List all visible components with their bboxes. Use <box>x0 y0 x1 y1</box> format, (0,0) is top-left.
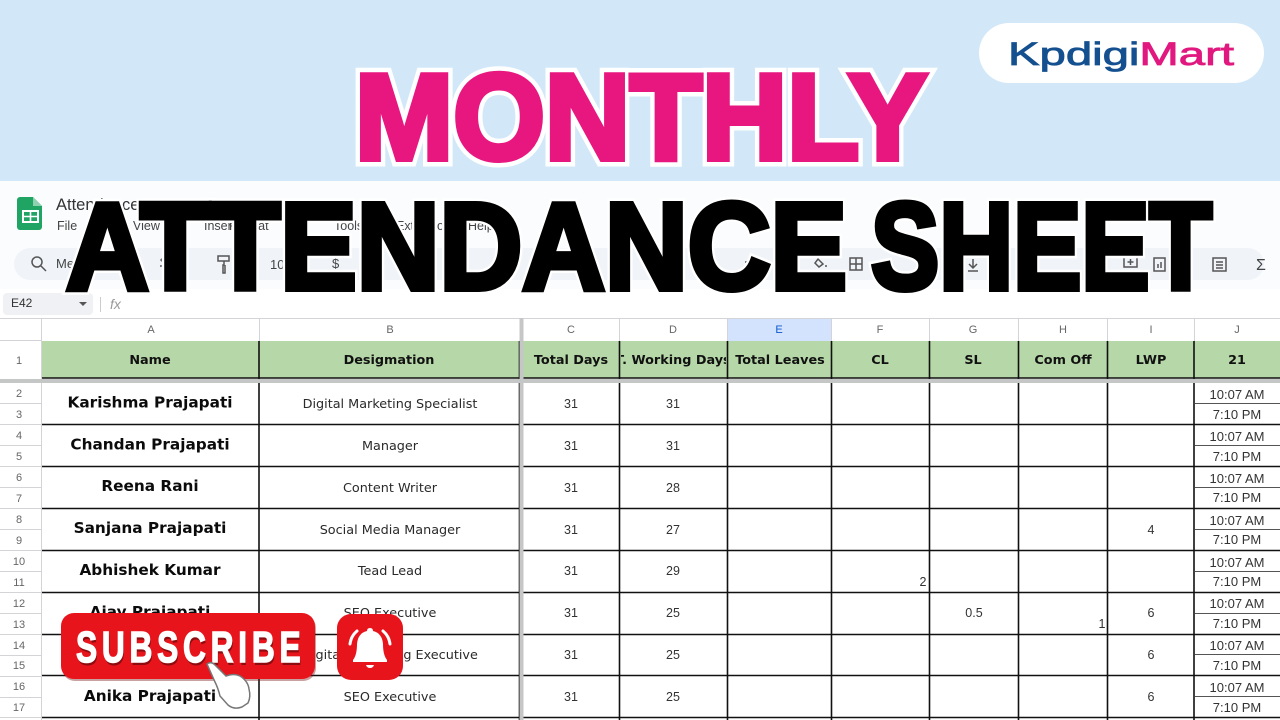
title: attendance sheet: SHEET <box>871 179 1212 316</box>
table header labels: Desigmation <box>344 353 434 368</box>
selected column header <box>728 318 831 341</box>
title: attendance sheet: ATTENDANCE <box>66 179 847 316</box>
clock times: 10:07 AM <box>1210 429 1264 444</box>
total days: 31 <box>564 481 578 495</box>
clock times: 10:07 AM <box>1210 387 1264 402</box>
column letters: E <box>775 324 783 336</box>
designations: Manager <box>362 439 419 454</box>
leave values: 4 <box>1148 523 1155 537</box>
column letters: D <box>669 324 677 336</box>
clock times: 7:10 PM <box>1213 700 1261 715</box>
working days: 29 <box>666 564 680 578</box>
subscribe button: SUBSCRIBE <box>77 626 302 675</box>
logo badge: Kpdigi Mart <box>1008 36 1234 72</box>
row numbers: 4 <box>16 430 22 442</box>
clock times: 10:07 AM <box>1210 596 1264 611</box>
employee names: Anika Prajapati <box>84 687 216 705</box>
clock times: 10:07 AM <box>1210 638 1264 653</box>
icon: sheets logo <box>17 197 42 230</box>
spreadsheet app chrome: $ <box>332 256 340 271</box>
menu bar <box>57 219 494 233</box>
spreadsheet app chrome <box>0 181 1280 318</box>
row numbers: 8 <box>16 514 22 526</box>
column letters: J <box>1234 324 1240 336</box>
clock times: 10:07 AM <box>1210 555 1264 570</box>
working days: 27 <box>666 523 680 537</box>
clock times <box>1210 387 1264 715</box>
column letters: C <box>567 324 575 336</box>
toolbar icons <box>32 256 1226 273</box>
row numbers: 5 <box>16 451 22 463</box>
row numbers: 2 <box>16 388 22 400</box>
total days: 31 <box>564 648 578 662</box>
row numbers: 11 <box>13 577 25 589</box>
grid lines <box>0 318 1280 720</box>
column letters: H <box>1059 324 1067 336</box>
table header labels: Com Off <box>1034 353 1092 368</box>
designations: Content Writer <box>343 481 438 496</box>
clock times: 7:10 PM <box>1213 532 1261 547</box>
name box <box>3 293 93 315</box>
column letters: G <box>969 324 977 336</box>
total days: 31 <box>564 606 578 620</box>
icon: notification bell <box>337 614 403 680</box>
employee names <box>67 394 233 705</box>
total days <box>564 397 578 704</box>
employee names: Karishma Prajapati <box>67 394 233 412</box>
column letters: I <box>1149 324 1153 336</box>
leave values: 6 <box>1148 648 1155 662</box>
table header labels: T. Working Days <box>615 353 731 368</box>
total days: 31 <box>564 564 578 578</box>
leave values: 2 <box>920 575 927 589</box>
title: monthly: MONTHLY <box>355 49 927 185</box>
row numbers: 6 <box>16 472 22 484</box>
clock times: 7:10 PM <box>1213 449 1261 464</box>
row numbers: 7 <box>16 493 22 505</box>
clock times: 10:07 AM <box>1210 513 1264 528</box>
row numbers: 9 <box>16 535 22 547</box>
working days: 31 <box>666 397 680 411</box>
table header labels: Name <box>129 353 171 368</box>
total days: 31 <box>564 523 578 537</box>
row numbers: 15 <box>13 660 25 672</box>
document title: Attendance <box>56 196 139 214</box>
total days: 31 <box>564 690 578 704</box>
clock times: 7:10 PM <box>1213 574 1261 589</box>
working days: 31 <box>666 439 680 453</box>
subscribe button <box>61 613 316 681</box>
table header labels: LWP <box>1136 353 1166 368</box>
row numbers: 13 <box>13 619 25 631</box>
table header labels: CL <box>871 353 889 368</box>
working days: 25 <box>666 690 680 704</box>
menu bar: Tools <box>334 219 363 233</box>
working days: 25 <box>666 606 680 620</box>
working days <box>666 397 680 704</box>
icon: pointing hand <box>207 663 250 708</box>
title: monthly: MONTHLY <box>355 49 927 185</box>
employee names: Ajay Prajapati <box>90 603 210 621</box>
leave values: 1 <box>1099 617 1106 631</box>
working days: 28 <box>666 481 680 495</box>
row numbers: 1 <box>16 355 22 367</box>
clock times: 7:10 PM <box>1213 616 1261 631</box>
frozen row and column bars <box>0 379 1280 383</box>
designations: Social Media Manager <box>320 523 461 538</box>
employee names: Chandan Prajapati <box>70 436 230 454</box>
leave values <box>920 523 1155 704</box>
row numbers: 3 <box>16 409 22 421</box>
designations: SEO Executive <box>344 690 436 705</box>
cell borders <box>42 341 1280 720</box>
leave values: 6 <box>1148 690 1155 704</box>
row numbers: 14 <box>13 640 25 652</box>
designations <box>302 397 478 705</box>
designations: Digital Marketing Specialist <box>303 397 477 412</box>
table header labels: 21 <box>1228 353 1246 368</box>
employee names: Sanjana Prajapati <box>74 519 226 537</box>
title: attendance sheet: SHEET <box>871 179 1212 316</box>
row numbers: 12 <box>13 598 25 610</box>
clock times: 7:10 PM <box>1213 407 1261 422</box>
designations: Tead Lead <box>357 564 422 579</box>
spreadsheet <box>0 318 1280 720</box>
clock times: 7:10 PM <box>1213 490 1261 505</box>
row numbers <box>13 355 25 714</box>
clock times: 10:07 AM <box>1210 471 1264 486</box>
spreadsheet app chrome: Σ <box>1256 257 1266 274</box>
menu bar: File <box>57 219 77 233</box>
total days: 31 <box>564 439 578 453</box>
clock times: 10:07 AM <box>1210 680 1264 695</box>
menu bar: Format <box>229 219 269 233</box>
row numbers: 17 <box>13 702 25 714</box>
table header labels: Total Leaves <box>735 353 825 368</box>
top blue banner <box>0 0 1280 181</box>
leave values: 6 <box>1148 606 1155 620</box>
formula icon: fx <box>110 296 122 312</box>
column letters: B <box>386 324 394 336</box>
row numbers: 16 <box>13 681 25 693</box>
column letters: A <box>147 324 155 336</box>
menu bar: Extensions <box>396 219 457 233</box>
column letters <box>147 324 1240 336</box>
spreadsheet app chrome: E42 <box>11 296 33 310</box>
row numbers: 10 <box>13 556 25 568</box>
subscribe button: SUBSCRIBE <box>76 623 301 672</box>
green header row <box>42 341 1280 378</box>
spreadsheet app chrome: 100% <box>270 257 304 272</box>
total days: 31 <box>564 397 578 411</box>
designations: SEO Executive <box>344 606 436 621</box>
employee names: Ritu Prajapati <box>90 645 210 663</box>
designations: Digital Marketing Executive <box>302 648 478 663</box>
employee names: Abhishek Kumar <box>79 561 221 579</box>
logo badge <box>979 23 1264 83</box>
title: attendance sheet: ATTENDANCE <box>66 179 847 316</box>
leave values: 0.5 <box>965 606 983 620</box>
menu bar: View <box>133 219 161 233</box>
column letters: F <box>877 324 884 336</box>
spreadsheet app chrome: Menus <box>56 256 96 271</box>
employee names: Reena Rani <box>101 477 199 495</box>
menu bar: Insert <box>204 219 236 233</box>
clock times: 7:10 PM <box>1213 658 1261 673</box>
working days: 25 <box>666 648 680 662</box>
table header labels: SL <box>964 353 982 368</box>
table header labels <box>129 353 1246 368</box>
menu bar: Help <box>468 219 494 233</box>
table header labels: Total Days <box>534 353 608 368</box>
